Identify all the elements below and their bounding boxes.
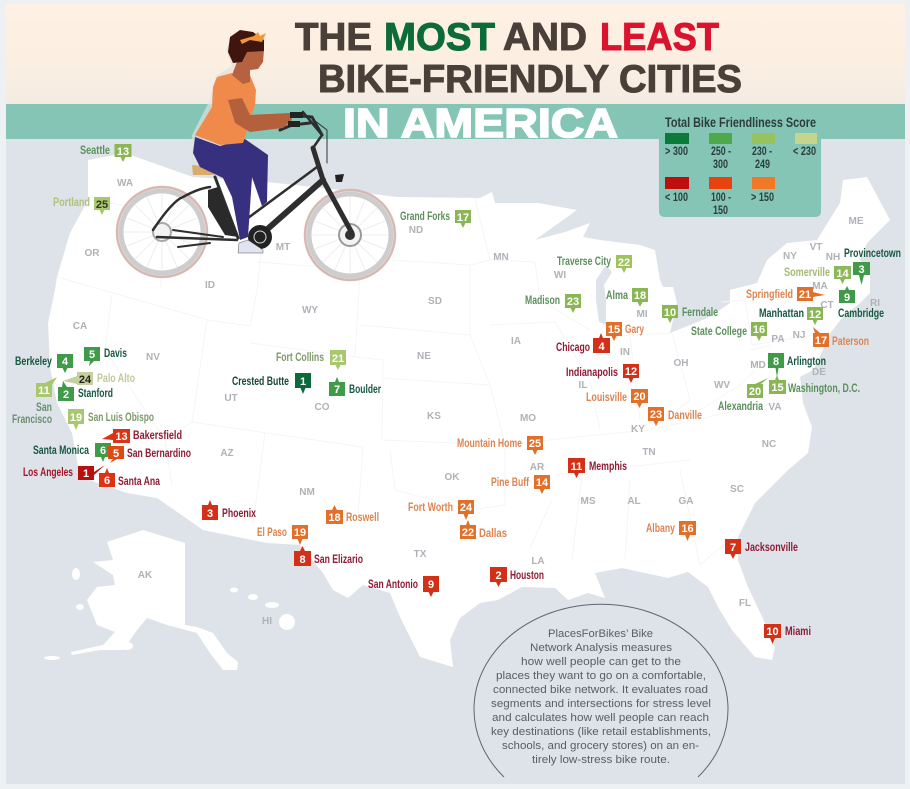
pin: Arlington — [768, 353, 826, 377]
state abbreviations: AL — [627, 496, 641, 507]
pin: Traverse City: 22 — [618, 257, 630, 269]
front wheel — [305, 190, 395, 280]
state abbreviations: MT — [276, 242, 290, 253]
state abbreviations: UT — [224, 393, 238, 404]
pin: Indianapolis: Indianapolis — [566, 365, 618, 379]
pin: Pine Buff: 14 — [536, 477, 549, 489]
pin: Crested Butte: 1 — [300, 376, 306, 388]
title: IN AMERICA — [343, 100, 618, 146]
explanatory arc callout: Network Analysis measures — [530, 642, 673, 654]
pin: San Luis Obispo: San Luis Obispo — [88, 410, 154, 424]
pin: Bakersfield: 13 — [115, 431, 128, 443]
pin: Fort Collins: Fort Collins — [276, 350, 324, 364]
rider shadow — [191, 35, 240, 172]
pin: Memphis — [568, 458, 627, 478]
pin: San Elizario: San Elizario — [314, 552, 363, 566]
pin: San Francisco: 11 — [38, 385, 50, 397]
pin: Portland: 25 — [96, 199, 108, 211]
explanatory arc callout: segments and intersections for stress level — [491, 698, 711, 710]
pin: Phoenix: Phoenix — [222, 506, 256, 520]
state abbreviations: FL — [739, 598, 751, 609]
state abbreviations: MO — [520, 413, 536, 424]
pin: Seattle: 13 — [117, 146, 129, 158]
pin: Los Angeles: 1 — [83, 468, 89, 480]
explanatory arc callout: key destinations (like retail establishments, — [491, 726, 711, 738]
state abbreviations: ME — [848, 216, 864, 227]
pin: Phoenix — [202, 500, 256, 520]
pin: Grand Forks: Grand Forks — [400, 209, 450, 223]
pin: Boulder: 7 — [334, 384, 340, 396]
pin: Stanford: 2 — [63, 389, 69, 401]
pin: Los Angeles: Los Angeles — [23, 465, 73, 479]
pin: Davis — [84, 346, 127, 366]
legend: total bike friendliness score: Total Bike Friendliness Score — [665, 115, 816, 130]
state abbreviations: MS — [580, 496, 596, 507]
pin: Crested Butte: Crested Butte — [232, 374, 289, 388]
state abbreviations: OH — [674, 358, 688, 369]
pin: Dallas: Dallas — [479, 526, 507, 540]
saddle — [192, 165, 215, 175]
pin: Gary: 15 — [608, 324, 620, 336]
state abbreviations: MN — [493, 252, 509, 263]
state abbreviations: CT — [820, 300, 834, 311]
state abbreviations: AZ — [220, 448, 234, 459]
legend: total bike friendliness score: 300 — [713, 159, 728, 171]
pin: Bakersfield — [102, 428, 182, 443]
pin: Springfield: 21 — [799, 289, 811, 301]
state abbreviations: CA — [73, 321, 87, 332]
pin: Ferndale: Ferndale — [682, 305, 718, 319]
pin: San Bernardino — [108, 446, 191, 463]
pin: Seattle: Seattle — [80, 143, 110, 157]
bike display — [335, 174, 344, 182]
pin: San Antonio: 9 — [428, 579, 434, 591]
pin: San Elizario: 8 — [299, 554, 306, 566]
pin: San Bernardino: 5 — [113, 448, 119, 460]
pin: Ferndale — [662, 305, 718, 323]
state abbreviations: NH — [826, 252, 840, 263]
pin: Mountain Home: 25 — [529, 438, 541, 450]
pin: Stanford: Stanford — [78, 386, 113, 400]
pin: Roswell: Roswell — [346, 510, 379, 524]
map: contiguous United States — [48, 153, 890, 667]
pin: Alexandria: Alexandria — [718, 399, 763, 413]
pin: Mountain Home: Mountain Home — [457, 436, 522, 450]
pin: Paterson — [813, 327, 869, 348]
teal title band — [6, 104, 905, 139]
pin: Bakersfield: Bakersfield — [133, 428, 182, 442]
title: LEAST — [600, 16, 719, 59]
state abbreviations: DE — [812, 367, 826, 378]
state abbreviations: RI — [870, 298, 880, 309]
explanatory arc callout: connected bike network. It evaluates road — [493, 684, 708, 696]
pin: State College: State College — [691, 324, 747, 338]
pin: Portland — [53, 195, 110, 215]
state abbreviations: WV — [714, 380, 730, 391]
rider legs — [193, 137, 268, 240]
state abbreviations: MI — [636, 309, 648, 320]
state abbreviations: GA — [678, 496, 694, 507]
explanatory arc callout: tirely low-stress bike route. — [532, 754, 670, 766]
pin: Gary: Gary — [625, 322, 644, 336]
pin: Santa Monica: Santa Monica — [33, 443, 89, 457]
pin: Washington, D.C.: Washington, D.C. — [788, 381, 860, 395]
pin: Houston: Houston — [510, 568, 544, 582]
pin: Cambridge — [838, 286, 884, 320]
state abbreviations: OK — [444, 472, 460, 483]
state abbreviations: SC — [730, 484, 744, 495]
pin: Alexandria — [718, 378, 768, 413]
pin: Manhattan — [759, 306, 823, 325]
pin: Louisville — [586, 389, 648, 408]
pin: Jacksonville: 7 — [730, 542, 736, 554]
state abbreviations: TN — [642, 447, 656, 458]
pin: Fort Worth — [408, 500, 474, 520]
pin: Berkeley: 4 — [62, 356, 69, 368]
explanatory arc callout: PlacesForBikes’ Bike — [548, 628, 653, 640]
state abbreviations: IN — [620, 347, 630, 358]
pin: Berkeley: Berkeley — [15, 354, 52, 368]
state abbreviations: WI — [554, 270, 566, 281]
pin: Somerville — [784, 265, 851, 284]
pin: Washington, D.C. — [769, 375, 860, 395]
map: Hawaii — [230, 588, 295, 630]
explanatory arc callout — [474, 604, 728, 777]
state abbreviations: VA — [768, 402, 782, 413]
pin: Santa Ana — [99, 468, 160, 488]
pin: Fort Collins: 21 — [332, 353, 344, 365]
state abbreviations: NJ — [793, 330, 805, 341]
state abbreviations: AR — [530, 462, 545, 473]
pin: Paterson: 17 — [815, 335, 827, 347]
state abbreviations: VT — [810, 242, 822, 253]
title: MOST — [384, 16, 495, 59]
legend: total bike friendliness score: 250 - — [711, 146, 731, 158]
pin: Grand Forks: 17 — [457, 212, 469, 224]
pin: Albany: 16 — [681, 523, 694, 535]
pin: Jacksonville: Jacksonville — [745, 540, 798, 554]
pin: Miami: Miami — [785, 624, 811, 638]
pin: Jacksonville — [725, 539, 798, 559]
explanatory arc callout: how well people can get to the — [521, 656, 681, 668]
legend: total bike friendliness score: 150 — [713, 205, 728, 217]
pin: San Antonio — [368, 576, 439, 597]
pin: San Antonio: San Antonio — [368, 577, 418, 591]
pin: Fort Collins — [276, 350, 346, 370]
pin: Crested Butte — [232, 373, 311, 394]
state abbreviations: AK — [138, 570, 153, 581]
state abbreviations: ND — [409, 225, 423, 236]
legend: total bike friendliness score: < 100 — [665, 192, 688, 204]
state abbreviations: NC — [762, 439, 776, 450]
pin: Madison — [525, 293, 581, 313]
pin: Fort Worth: Fort Worth — [408, 500, 453, 514]
pin: Boulder — [329, 377, 381, 396]
pin: Palo Alto: Palo Alto — [97, 371, 135, 385]
pin: Provincetown: 3 — [858, 264, 865, 276]
pin: Chicago: 4 — [598, 341, 605, 353]
battery — [208, 187, 238, 237]
title: THE — [295, 16, 372, 59]
pin: Memphis: 11 — [571, 461, 582, 473]
legend: total bike friendliness score: < 230 — [793, 146, 816, 158]
illustration: cyclist on electric bike — [117, 30, 395, 280]
pin: San Bernardino: San Bernardino — [127, 446, 191, 460]
pin: Houston — [490, 567, 544, 587]
state abbreviations: OR — [84, 248, 100, 259]
pin: Pine Buff — [491, 475, 550, 494]
handgrip — [288, 112, 303, 127]
legend: total bike friendliness score: 249 — [755, 159, 770, 171]
legend: total bike friendliness score: > 300 — [665, 146, 688, 158]
state abbreviations: ID — [205, 280, 215, 291]
pin: Santa Ana: 6 — [104, 475, 110, 487]
pin: Phoenix: 3 — [207, 508, 213, 520]
legend: total bike friendliness score: 100 - — [711, 192, 731, 204]
state abbreviations: PA — [771, 334, 785, 345]
pin: Danville — [648, 407, 702, 426]
pin: Indianapolis: 12 — [625, 366, 637, 378]
pin: Danville: 23 — [650, 409, 662, 421]
pin: Alma — [606, 288, 648, 307]
pin: Danville: Danville — [668, 408, 702, 422]
pin: Portland: Portland — [53, 195, 90, 209]
pin: Santa Ana: Santa Ana — [118, 474, 160, 488]
title: AND — [503, 16, 587, 59]
pin: Santa Monica: 6 — [100, 445, 106, 457]
pin: Roswell — [326, 505, 379, 524]
explanatory arc callout: places they want to go on a comfortable, — [496, 670, 706, 682]
pin: El Paso: El Paso — [257, 525, 287, 539]
pin: State College: 16 — [753, 324, 765, 336]
state abbreviations: HI — [262, 616, 272, 627]
pin: Stanford — [58, 381, 113, 401]
state abbreviations: SD — [428, 296, 442, 307]
pin: Alma: Alma — [606, 288, 628, 302]
bike frame — [153, 112, 352, 247]
pin: Roswell: 18 — [328, 512, 341, 524]
pin: Chicago — [556, 333, 610, 354]
state abbreviations: WA — [117, 178, 133, 189]
rear wheel — [117, 187, 207, 277]
state abbreviations: CO — [314, 402, 330, 413]
pin: San Elizario — [294, 546, 363, 566]
pin: Palo Alto: 24 — [79, 374, 92, 386]
state abbreviations — [73, 178, 880, 627]
state abbreviations: NY — [783, 251, 797, 262]
header background — [6, 4, 905, 105]
pin: Louisville: Louisville — [586, 390, 627, 404]
pin: Pine Buff: Pine Buff — [491, 475, 530, 489]
state abbreviations: TX — [414, 549, 427, 560]
pin: Paterson: Paterson — [832, 334, 869, 348]
pin: Manhattan: 12 — [809, 309, 821, 321]
pin: San Francisco — [12, 377, 57, 426]
pin: Berkeley — [15, 354, 73, 373]
pin: Arlington: Arlington — [787, 354, 826, 368]
pin: Traverse City: Traverse City — [557, 254, 611, 268]
state abbreviations: IL — [579, 380, 587, 391]
pin: Fort Worth: 24 — [460, 502, 473, 514]
crank — [248, 225, 272, 249]
pin: San Luis Obispo: 19 — [70, 412, 82, 424]
state abbreviations: MA — [812, 281, 828, 292]
pin: Gary — [606, 322, 644, 341]
pin: Memphis: Memphis — [589, 459, 627, 473]
pin: Alma: 18 — [634, 290, 646, 302]
state abbreviations: NE — [417, 351, 431, 362]
rider arm — [228, 98, 292, 132]
explanatory arc callout: schools, and grocery stores) on an en- — [502, 740, 699, 752]
pin: Davis: Davis — [104, 346, 127, 360]
pin: San Francisco: Francisco — [12, 412, 52, 426]
hair — [228, 30, 264, 63]
pin: Ferndale: 10 — [664, 307, 676, 319]
pin: Miami — [764, 624, 811, 644]
pin: Palo Alto — [63, 371, 135, 386]
legend: total bike friendliness score: 230 - — [752, 146, 772, 158]
pin: Madison: Madison — [525, 293, 560, 307]
neck and head — [232, 50, 264, 84]
pin: Manhattan: Manhattan — [759, 306, 804, 320]
state abbreviations: WY — [302, 305, 318, 316]
pin: Washington, D.C.: 15 — [771, 382, 784, 394]
state abbreviations: IA — [511, 336, 521, 347]
pin: San Luis Obispo — [68, 409, 154, 430]
legend: total bike friendliness score: > 150 — [751, 192, 774, 204]
pin: Albany: Albany — [646, 521, 675, 535]
state abbreviations: KS — [427, 411, 441, 422]
pin: Houston: 2 — [495, 570, 502, 582]
pin: Dallas: 22 — [462, 527, 474, 539]
state abbreviations: KY — [631, 424, 645, 435]
pin: Arlington: 8 — [773, 356, 779, 368]
pin: Miami: 10 — [766, 626, 779, 638]
pin: Madison: 23 — [567, 296, 579, 308]
pin: Albany — [646, 521, 696, 541]
headband — [240, 32, 266, 44]
pin: El Paso — [257, 525, 308, 545]
legend: total bike friendliness score — [659, 115, 821, 217]
rider shirt — [195, 73, 256, 145]
pin: Alexandria: 20 — [749, 386, 761, 398]
pin: San Francisco: San — [36, 400, 52, 414]
state abbreviations: MD — [750, 360, 766, 371]
pin: Cambridge: Cambridge — [838, 306, 884, 320]
state abbreviations: NV — [146, 352, 160, 363]
state abbreviations: LA — [531, 556, 545, 567]
pin: Somerville: 14 — [836, 268, 849, 280]
pin: Chicago: Chicago — [556, 340, 590, 354]
pin: Seattle — [80, 143, 132, 162]
map: Alaska — [44, 530, 238, 670]
title: BIKE-FRIENDLY CITIES — [318, 58, 742, 101]
shoe — [238, 240, 263, 253]
pin: Provincetown — [844, 246, 901, 285]
title — [295, 16, 742, 146]
explanatory arc callout: and calculates how well people can reach — [492, 712, 709, 724]
pin: Davis: 5 — [89, 349, 95, 361]
pin: Louisville: 20 — [633, 391, 646, 403]
state abbreviations: NM — [299, 487, 315, 498]
pin: Springfield: Springfield — [746, 287, 793, 301]
pin: Boulder: Boulder — [349, 382, 381, 396]
pin: Cambridge: 9 — [844, 292, 850, 304]
pin: El Paso: 19 — [294, 527, 306, 539]
pin: Somerville: Somerville — [784, 265, 830, 279]
pin: Dallas — [460, 520, 507, 540]
